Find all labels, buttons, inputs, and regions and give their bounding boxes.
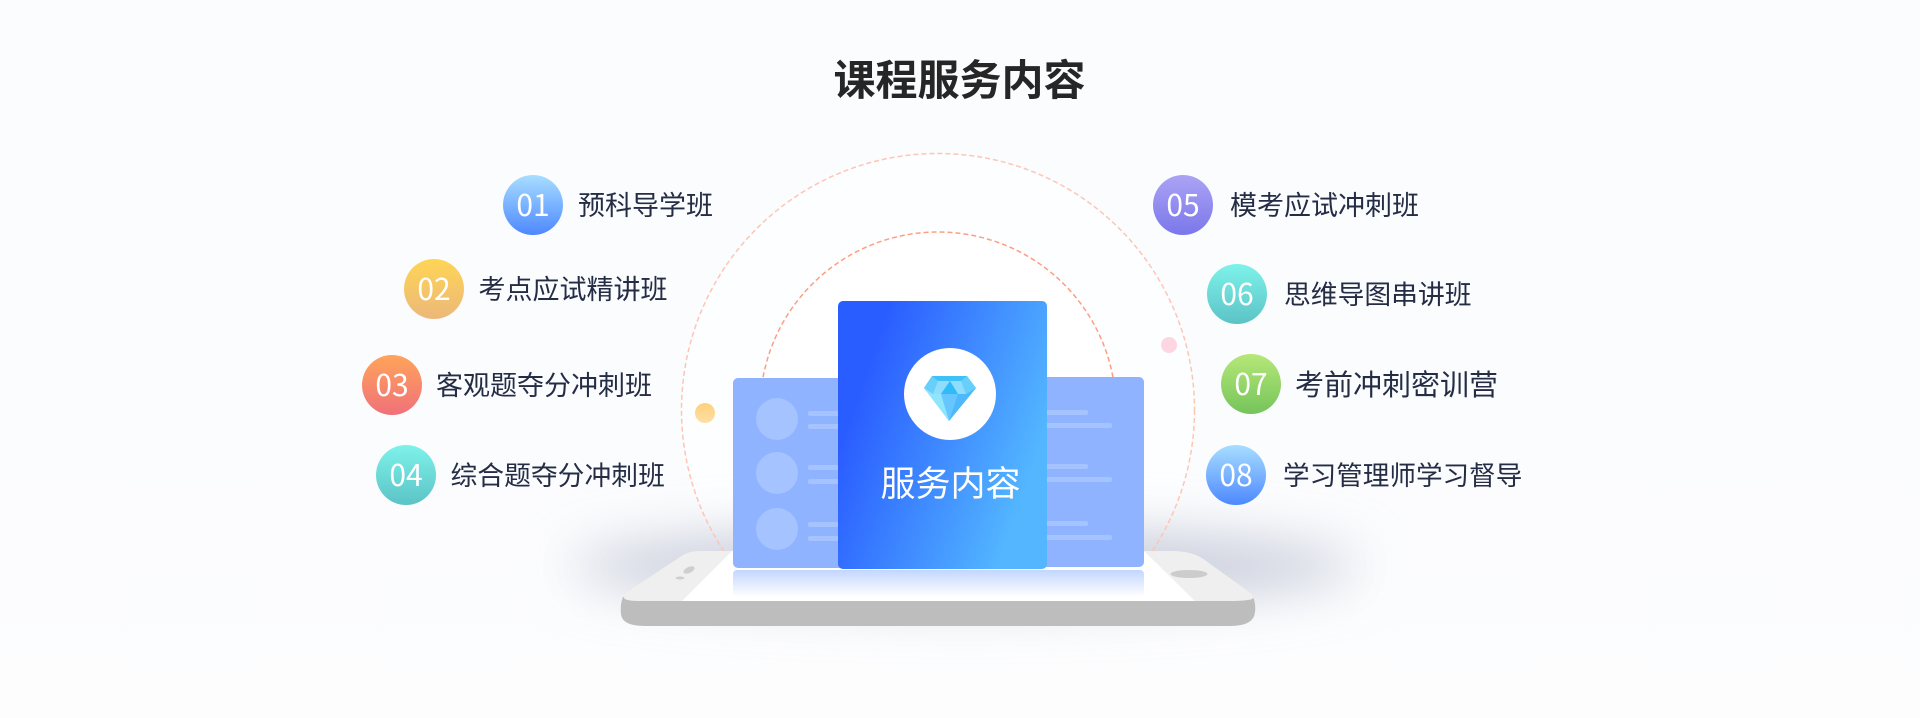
item 06 bbox=[1207, 264, 1472, 324]
decorative yellow dot bbox=[695, 403, 715, 423]
ring fill: outer halo bbox=[682, 154, 1194, 666]
item 08 bbox=[1206, 445, 1522, 505]
ring fill: inner white disc bbox=[760, 232, 1116, 588]
item 07: 考前冲刺密训营 bbox=[1295, 369, 1498, 402]
dashed inner ring bbox=[762, 231, 1114, 378]
item 05 bbox=[1153, 175, 1419, 235]
item 02: 02 bbox=[417, 265, 451, 309]
left back card bbox=[733, 378, 853, 568]
item 01: 预科导学班 bbox=[578, 191, 713, 221]
item 03: 客观题夺分冲刺班 bbox=[436, 371, 652, 401]
card label: 服务内容 bbox=[880, 465, 1021, 504]
phone camera bbox=[676, 576, 684, 580]
item 04 bbox=[376, 445, 665, 505]
item 07: 07 bbox=[1234, 360, 1268, 404]
phone home button bbox=[1170, 570, 1208, 578]
item 04: 04 bbox=[389, 451, 423, 495]
item 08: 08 bbox=[1219, 451, 1253, 495]
title: 课程服务内容 bbox=[833, 57, 1086, 104]
right back card bbox=[1030, 377, 1144, 567]
icon: diamond badge bbox=[904, 348, 996, 440]
item 03: 03 bbox=[375, 361, 409, 405]
item 03 bbox=[362, 355, 652, 415]
item 01: 01 bbox=[516, 181, 550, 225]
item 05: 模考应试冲刺班 bbox=[1230, 191, 1419, 221]
phone speaker bbox=[682, 565, 696, 575]
item 08: 学习管理师学习督导 bbox=[1283, 461, 1522, 491]
item 06: 思维导图串讲班 bbox=[1284, 280, 1472, 310]
phone bbox=[621, 551, 1255, 626]
card reflection bbox=[733, 570, 1144, 597]
item 02 bbox=[404, 259, 668, 319]
item 06: 06 bbox=[1220, 270, 1254, 314]
item 02: 考点应试精讲班 bbox=[478, 275, 668, 305]
item 07 bbox=[1221, 354, 1498, 414]
phone screen bbox=[682, 551, 1195, 601]
item 01 bbox=[503, 175, 713, 235]
phone body edge bbox=[621, 597, 1255, 626]
dashed outer ring bbox=[680, 152, 1196, 551]
center card bbox=[838, 301, 1047, 569]
decorative pink dot bbox=[1161, 337, 1177, 353]
phone face bbox=[624, 551, 1253, 601]
item 05: 05 bbox=[1166, 181, 1200, 225]
phone ground shadow bbox=[570, 530, 1360, 602]
item 04: 综合题夺分冲刺班 bbox=[450, 461, 665, 491]
